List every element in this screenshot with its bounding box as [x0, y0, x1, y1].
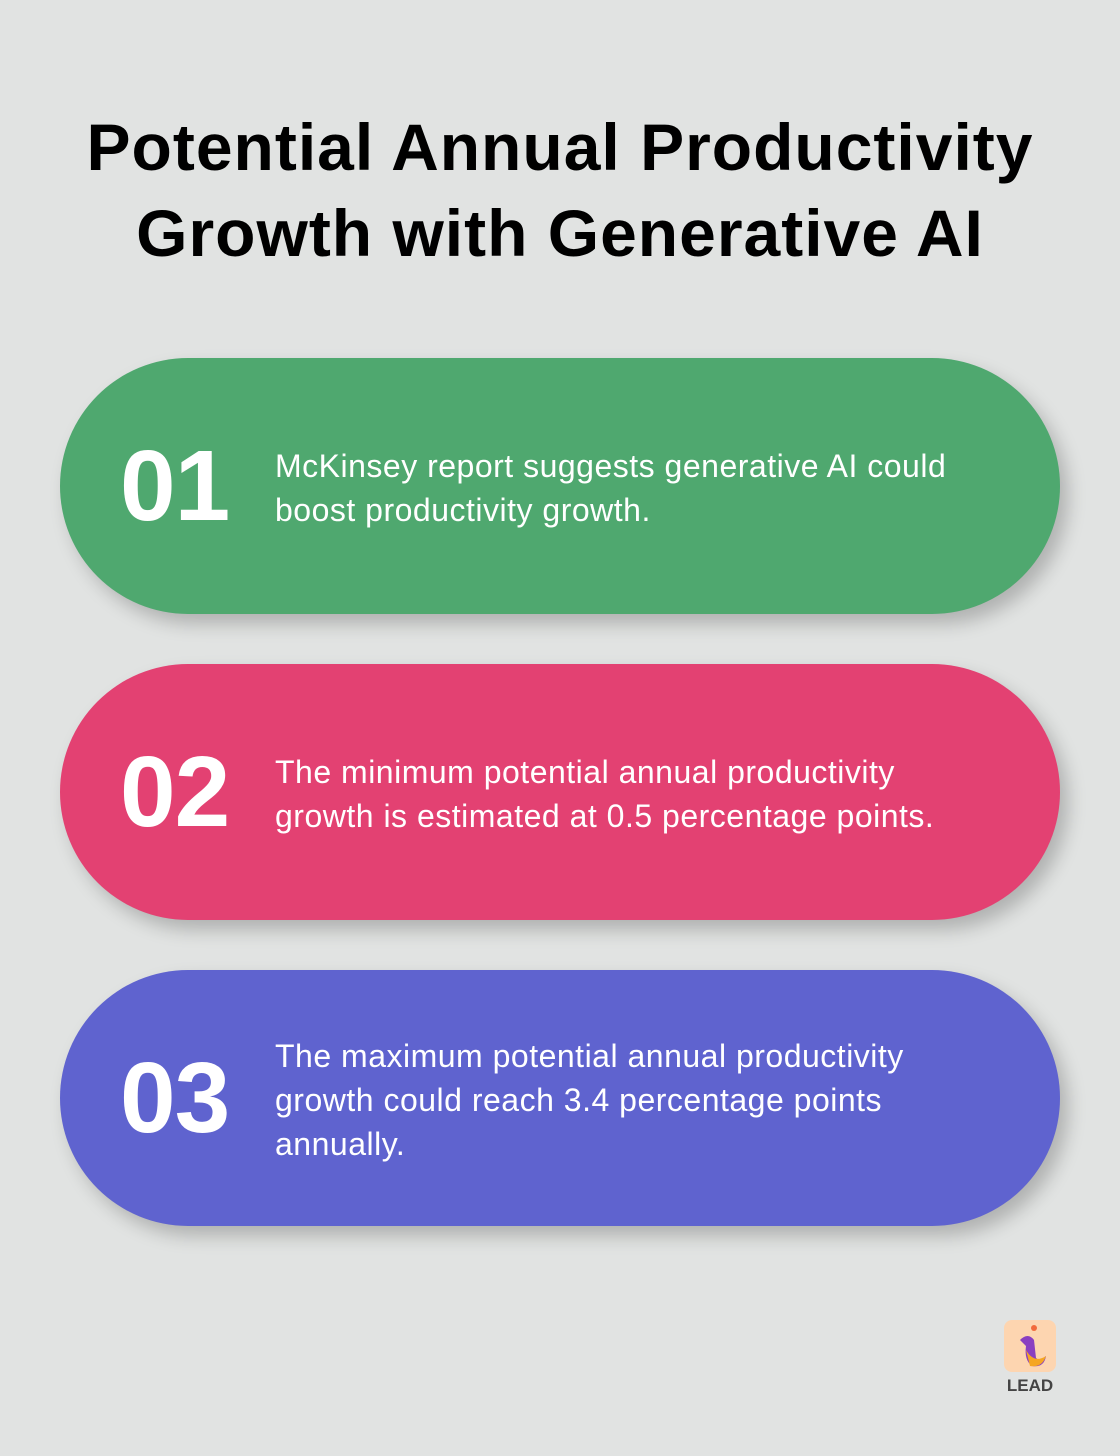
number 03: 03: [120, 1042, 229, 1154]
title: [86, 110, 1033, 270]
text 02: The minimum potential annual productivity growth is estimated at 0.5 percentage points.: [275, 754, 934, 834]
number 01: 01: [120, 430, 229, 542]
text 01: McKinsey report suggests generative AI could boost productivity growth.: [275, 448, 946, 528]
logo: [1004, 1320, 1056, 1395]
card 01: [60, 358, 1060, 614]
card 02: [60, 664, 1060, 920]
title: Growth with Generative AI: [136, 196, 984, 270]
logo text: LEAD: [1007, 1376, 1053, 1395]
logo icon: [1004, 1320, 1056, 1372]
title: Potential Annual Productivity: [86, 110, 1033, 184]
card 03: [60, 970, 1060, 1226]
number 02: 02: [120, 736, 229, 848]
text 03: The maximum potential annual productivity growth could reach 3.4 percentage points annually.: [275, 1038, 904, 1162]
